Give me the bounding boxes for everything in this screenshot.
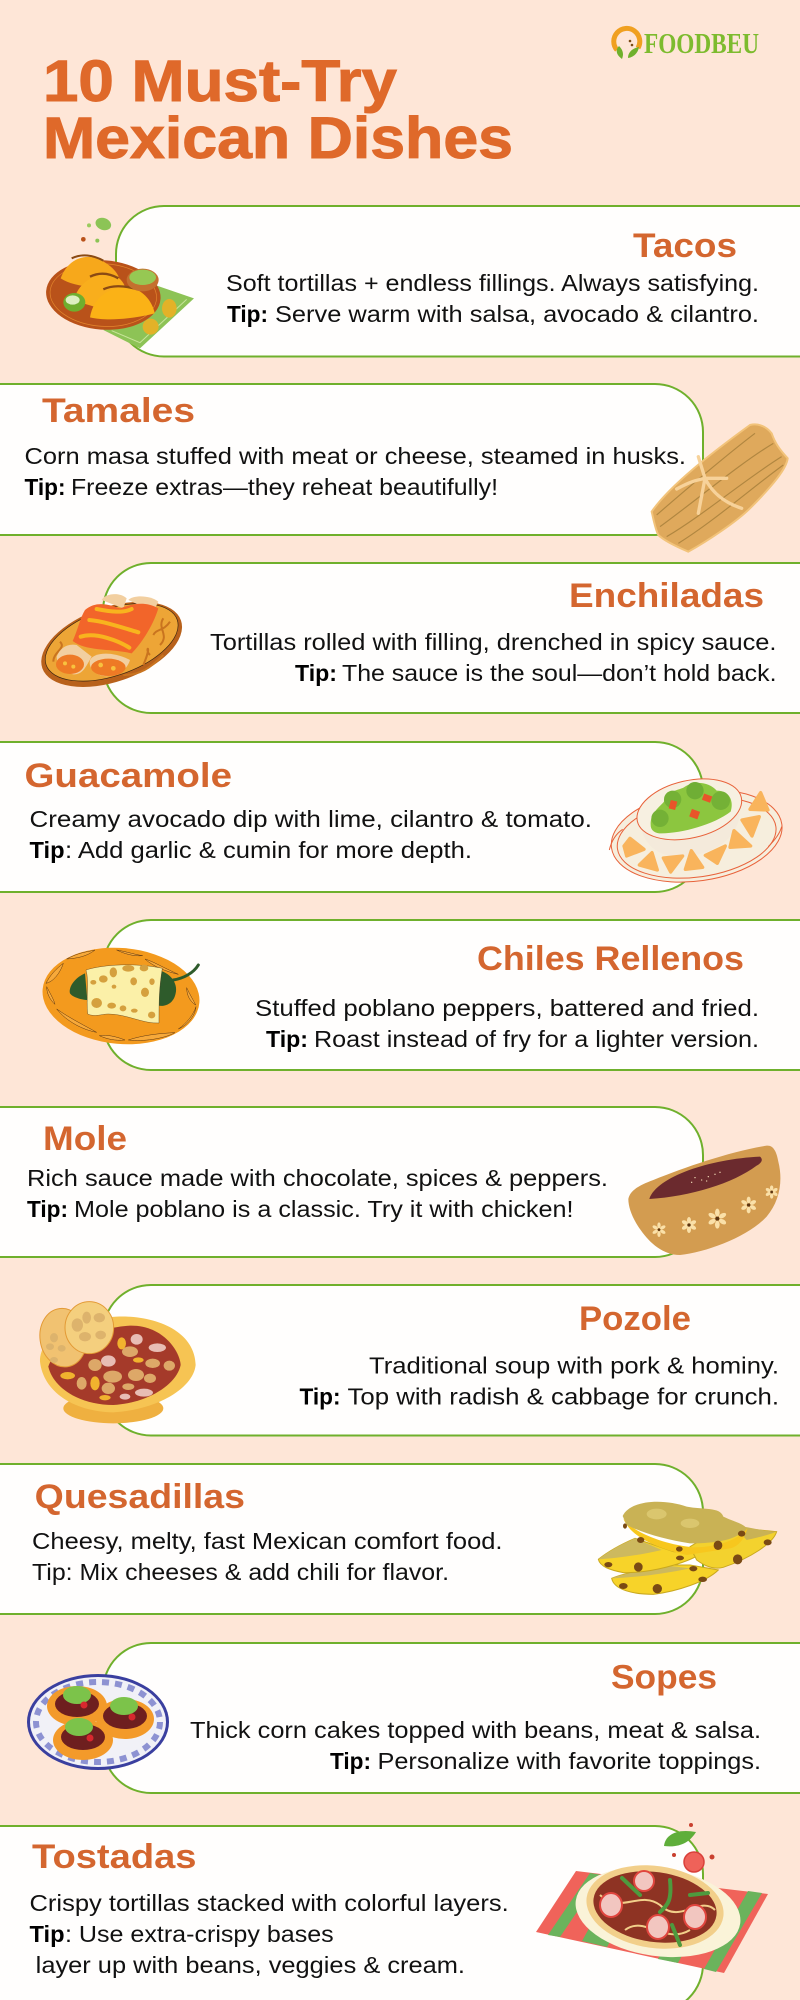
text: Sopes tip: Tip: [330,1748,371,1774]
text: Mole description: Rich sauce made with chocolate, spices & peppers. [27,1165,608,1191]
panel: Enchiladas [30,563,800,713]
panel: Guacamole [0,742,788,893]
text: Tamales description: Corn masa stuffed with meat or cheese, steamed in husks. [24,443,686,469]
heading: Guacamole: Guacamole [24,757,232,795]
heading: Tacos: Tacos [633,227,737,265]
heading: Tostadas: Tostadas [32,1838,196,1876]
panel: Chiles Rellenos [38,920,800,1070]
icon: enchiladas plate [30,585,193,703]
text: Tacos description: Soft tortillas + endless fillings. Always satisfying. [226,270,759,296]
heading: Mole: Mole [43,1120,127,1158]
text: Quesadillas tip: Tip: Mix cheeses & add chili for flavor. [32,1559,449,1585]
icon: mole bowl [628,1146,780,1255]
heading: Tamales: Tamales [42,392,195,430]
text: Chiles Rellenos description: Stuffed poblano peppers, battered and fried. [255,995,759,1021]
text: Tostadas tip: layer up with beans, veggies & cream. [36,1952,465,1978]
panel: Sopes [27,1643,800,1793]
icon: quesadillas [598,1502,777,1594]
icon: leaf garnish [664,1831,696,1846]
panel: Tamales [0,384,788,552]
text: Chiles Rellenos tip: Roast instead of fry for a lighter version. [314,1026,759,1052]
text: Pozole tip: Top with radish & cabbage for crunch. [348,1384,779,1410]
text: Tostadas description: Crispy tortillas stacked with colorful layers. [30,1890,509,1916]
icon: tostada on striped mat [536,1823,768,1973]
text: Enchiladas tip: Tip: [295,660,337,686]
text: Guacamole tip: Tip [30,837,64,863]
text: Enchiladas description: Tortillas rolled with filling, drenched in spicy sauce. [210,629,776,655]
heading: Enchiladas: Enchiladas [569,577,764,615]
icon: tamale [652,424,788,552]
text: Sopes tip: Personalize with favorite toppings. [378,1748,761,1774]
title: Mexican Dishes [43,106,513,171]
text: Guacamole description: Creamy avocado dip with lime, cilantro & tomato. [30,806,592,832]
heading: Chiles Rellenos: Chiles Rellenos [477,940,744,978]
panel: Tostadas [0,1823,768,2000]
heading: Sopes: Sopes [611,1658,717,1696]
title: 10 Must-Try [43,49,397,114]
icon: chile relleno plate [38,941,204,1051]
title [43,49,513,171]
logo: FOODBEU: FOODBEU [644,29,759,60]
text: Tamales tip: Freeze extras—they reheat beautifully! [71,474,498,500]
text: Tacos tip: Serve warm with salsa, avocado & cilantro. [275,301,759,327]
heading: Pozole: Pozole [579,1300,691,1338]
text: Tostadas tip: Tip [30,1921,64,1947]
text: Enchiladas tip: The sauce is the soul—don’t hold back. [342,660,776,686]
heading: Quesadillas: Quesadillas [35,1478,245,1516]
panel: Tacos [44,206,800,356]
panel: Quesadillas [0,1464,777,1614]
icon: sopes plate [27,1674,169,1770]
text: Mole tip: Mole poblano is a classic. Try it with chicken! [74,1196,574,1222]
panel: Mole [0,1107,780,1257]
icon: tacos plate [44,216,194,348]
logo: FOODBEU [614,28,759,60]
text: Tamales tip: Tip: [24,474,66,500]
icon: guacamole bowl with chips [605,769,788,893]
text: Chiles Rellenos tip: Tip: [266,1026,308,1052]
icon: pozole bowl with tostadas [36,1302,196,1423]
text: Tostadas tip: : Use extra-crispy bases [65,1921,334,1947]
text: Tacos tip: Tip: [227,301,268,327]
text: Mole tip: Tip: [27,1196,68,1222]
text: Sopes description: Thick corn cakes topped with beans, meat & salsa. [190,1717,761,1743]
text: Pozole description: Traditional soup with pork & hominy. [369,1352,779,1378]
text: Quesadillas description: Cheesy, melty, fast Mexican comfort food. [32,1528,502,1554]
text: Tostadas tip [30,1921,465,1978]
text: Pozole tip: Tip: [300,1384,340,1410]
text: Guacamole tip: : Add garlic & cumin for more depth. [65,837,472,863]
panel: Pozole [36,1285,800,1436]
